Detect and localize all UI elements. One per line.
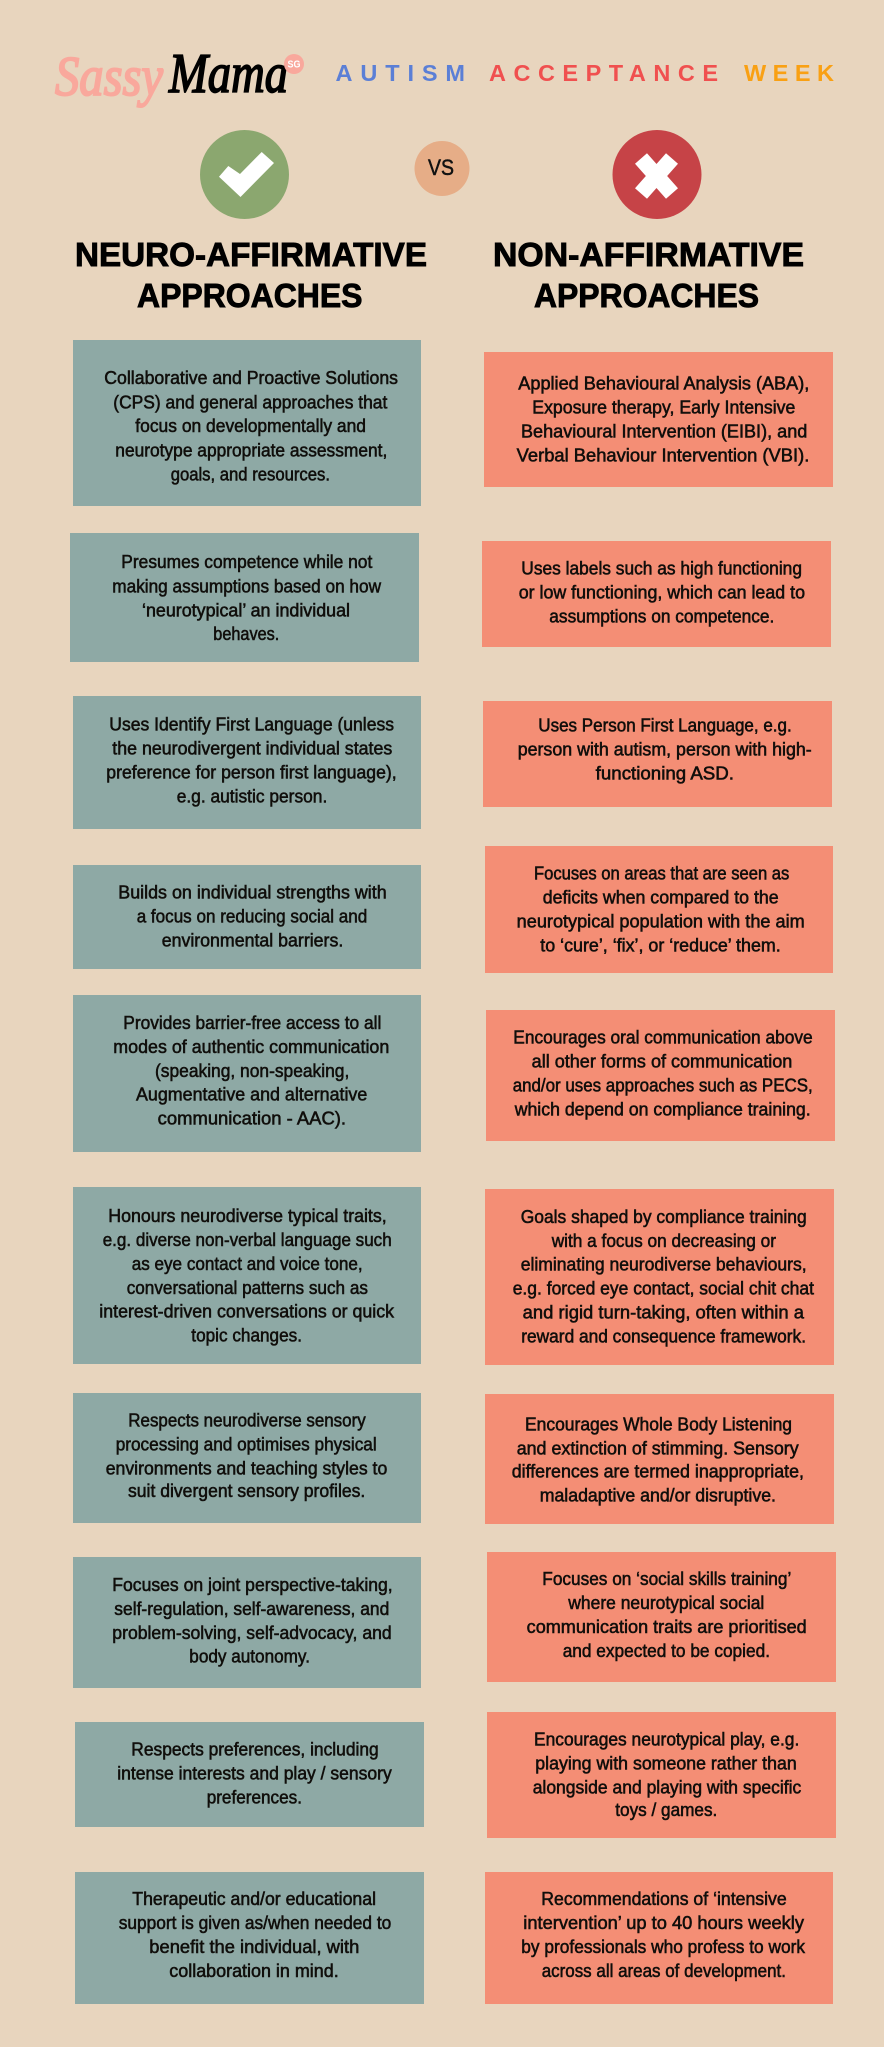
heading: non-affirmative approaches: [493, 236, 804, 314]
panel: neuro-affirmative 4: [73, 865, 421, 969]
panel: neuro-affirmative 8: self-regulation, self-awareness, and: [114, 1599, 389, 1619]
panel: non-affirmative 6: and rigid turn-taking, often within a: [523, 1302, 805, 1322]
panel: neuro-affirmative 5: (speaking, non-speaking,: [155, 1061, 349, 1081]
logo: Sassy Mama SG: Mama: [168, 43, 288, 105]
panel: non-affirmative 10: [485, 1872, 833, 2004]
panel: non-affirmative 6: Goals shaped by compliance training: [521, 1207, 807, 1227]
panel: non-affirmative 3: person with autism, person with high-: [518, 739, 812, 759]
panel: neuro-affirmative 3: Uses Identify First Language (unless: [109, 714, 394, 734]
panel: neuro-affirmative 8: problem-solving, self-advocacy, and: [112, 1623, 392, 1643]
panel: neuro-affirmative 1: neurotype appropriate assessment,: [115, 440, 387, 460]
panel: neuro-affirmative 6: conversational patterns such as: [127, 1278, 368, 1298]
panel: non-affirmative 5: Encourages oral communication above: [513, 1027, 813, 1047]
panel: non-affirmative 2: [482, 541, 831, 647]
panel: non-affirmative 9: toys / games.: [615, 1800, 717, 1820]
panel: non-affirmative 6: with a focus on decreasing or: [551, 1231, 776, 1251]
panel: neuro-affirmative 7: Respects neurodiverse sensory: [128, 1410, 366, 1430]
panel: non-affirmative 5: [486, 1010, 835, 1141]
panel: non-affirmative 1: Behavioural Intervention (EIBI), and: [521, 421, 807, 441]
panel: neuro-affirmative 8: Focuses on joint perspective-taking,: [112, 1575, 393, 1595]
panel: non-affirmative 8: where neurotypical social: [567, 1593, 764, 1613]
panel: non-affirmative 4: to ‘cure’, ‘fix’, or ‘reduce’ them.: [540, 935, 781, 955]
panel: neuro-affirmative 9: intense interests and play / sensory: [117, 1763, 392, 1783]
panel: neuro-affirmative 10: collaboration in mind.: [169, 1961, 339, 1981]
panel: neuro-affirmative 10: support is given as/when needed to: [119, 1913, 391, 1933]
panel: non-affirmative 2: or low functioning, which can lead to: [519, 582, 805, 602]
panel: non-affirmative 9: [487, 1712, 836, 1838]
panel: neuro-affirmative 5: Augmentative and alternative: [136, 1084, 367, 1104]
panel: non-affirmative 9: Encourages neurotypical play, e.g.: [534, 1729, 799, 1749]
panel: non-affirmative 10: Recommendations of ‘intensive: [541, 1889, 787, 1909]
panel: neuro-affirmative 7: processing and optimises physical: [116, 1434, 377, 1454]
panel: neuro-affirmative 9: Respects preferences, including: [131, 1739, 379, 1759]
title: Autism Acceptance Week: WEEK: [744, 60, 834, 86]
icon: VS badge: [414, 141, 470, 196]
panel: neuro-affirmative 3: e.g. autistic person.: [177, 787, 327, 807]
panel: neuro-affirmative 5: modes of authentic communication: [113, 1037, 389, 1057]
panel: neuro-affirmative 10: [75, 1872, 424, 2004]
panel: neuro-affirmative 1: (CPS) and general approaches that: [113, 392, 387, 412]
panel: neuro-affirmative 5: [73, 995, 421, 1152]
panel: neuro-affirmative 1: Collaborative and Proactive Solutions: [104, 368, 398, 388]
panel: non-affirmative 7: maladaptive and/or disruptive.: [540, 1486, 776, 1506]
panel: neuro-affirmative 8: [73, 1557, 421, 1688]
panel: non-affirmative 9: alongside and playing with specific: [533, 1777, 801, 1797]
panel: neuro-affirmative 4: Builds on individual strengths with: [118, 882, 387, 902]
panel: neuro-affirmative 2: ‘neurotypical’ an individual: [142, 601, 350, 621]
panel: neuro-affirmative 5: communication - AAC).: [158, 1108, 346, 1128]
panel: non-affirmative 3: [483, 701, 832, 807]
logo: Sassy Mama SG: SG: [288, 60, 301, 70]
panel: non-affirmative 4: Focuses on areas that are seen as: [534, 863, 789, 883]
panel: neuro-affirmative 4: a focus on reducing social and: [137, 906, 367, 926]
heading: non-affirmative approaches: APPROACHES: [534, 277, 759, 314]
panel: non-affirmative 6: e.g. forced eye contact, social chit chat: [513, 1278, 814, 1298]
title: Autism Acceptance Week: ACCEPTANCE: [489, 60, 718, 86]
panel: non-affirmative 2: assumptions on competence.: [549, 607, 774, 627]
panel: non-affirmative 7: Encourages Whole Body Listening: [525, 1414, 792, 1434]
panel: non-affirmative 8: [487, 1552, 836, 1682]
panel: neuro-affirmative 7: [73, 1393, 421, 1523]
panel: neuro-affirmative 6: topic changes.: [191, 1325, 302, 1345]
panel: non-affirmative 1: Verbal Behaviour Intervention (VBI).: [517, 445, 809, 465]
panel: non-affirmative 6: reward and consequence framework.: [521, 1326, 806, 1346]
heading: neuro-affirmative approaches: [75, 236, 427, 314]
panel: neuro-affirmative 3: [73, 696, 421, 829]
panel: neuro-affirmative 10: Therapeutic and/or educational: [132, 1889, 376, 1909]
panel: neuro-affirmative 6: e.g. diverse non-verbal language such: [103, 1230, 392, 1250]
panel: neuro-affirmative 6: interest-driven conversations or quick: [99, 1301, 395, 1321]
panel: non-affirmative 5: all other forms of communication: [532, 1051, 792, 1071]
panel: neuro-affirmative 7: environments and teaching styles to: [106, 1458, 387, 1478]
title: Autism Acceptance Week: [336, 60, 834, 86]
panel: neuro-affirmative 1: goals, and resources.: [171, 464, 330, 484]
panel: non-affirmative 6: eliminating neurodiverse behaviours,: [521, 1254, 807, 1274]
panel: non-affirmative 3: functioning ASD.: [596, 763, 734, 783]
panel: non-affirmative 3: Uses Person First Language, e.g.: [538, 715, 792, 735]
panel: neuro-affirmative 2: [70, 533, 419, 662]
panel: neuro-affirmative 2: making assumptions based on how: [112, 576, 382, 596]
panel: neuro-affirmative 7: suit divergent sensory profiles.: [128, 1481, 365, 1501]
panel: non-affirmative 7: [485, 1394, 834, 1524]
panel: neuro-affirmative 8: body autonomy.: [189, 1646, 310, 1666]
panel: neuro-affirmative 2: behaves.: [213, 624, 279, 644]
panel: non-affirmative 1: Exposure therapy, Early Intensive: [532, 397, 795, 417]
panel: neuro-affirmative 6: [73, 1187, 421, 1364]
title: Autism Acceptance Week: AUTISM: [336, 60, 465, 86]
panel: non-affirmative 8: communication traits are prioritised: [527, 1617, 807, 1637]
panel: non-affirmative 4: neurotypical population with the aim: [517, 911, 805, 931]
panel: non-affirmative 5: which depend on compliance training.: [514, 1099, 811, 1119]
panel: non-affirmative 1: Applied Behavioural Analysis (ABA),: [518, 373, 809, 393]
panel: neuro-affirmative 10: benefit the individual, with: [149, 1937, 359, 1957]
panel: non-affirmative 8: and expected to be copied.: [563, 1641, 770, 1661]
panel: non-affirmative 10: by professionals who profess to work: [521, 1937, 806, 1957]
panel: neuro-affirmative 1: focus on developmentally and: [135, 416, 366, 436]
icon: red cross: [612, 130, 702, 219]
panel: non-affirmative 2: Uses labels such as high functioning: [521, 558, 802, 578]
logo: Sassy Mama SG: Sassy: [55, 46, 163, 108]
panel: non-affirmative 10: across all areas of development.: [542, 1961, 786, 1981]
panel: neuro-affirmative 1: [73, 340, 421, 506]
panel: neuro-affirmative 4: environmental barriers.: [162, 930, 343, 950]
panel: non-affirmative 5: and/or uses approaches such as PECS,: [513, 1075, 813, 1095]
panel: neuro-affirmative 9: [75, 1722, 424, 1827]
heading: non-affirmative approaches: NON-AFFIRMATIVE: [493, 236, 804, 273]
icon: green check: [200, 130, 289, 219]
panel: neuro-affirmative 6: Honours neurodiverse typical traits,: [108, 1206, 387, 1226]
panel: neuro-affirmative 6: as eye contact and voice tone,: [132, 1254, 363, 1274]
panel: non-affirmative 10: intervention’ up to 40 hours weekly: [523, 1913, 804, 1933]
panel: neuro-affirmative 2: Presumes competence while not: [121, 552, 372, 572]
panel: non-affirmative 7: differences are termed inappropriate,: [512, 1462, 804, 1482]
panel: non-affirmative 7: and extinction of stimming. Sensory: [517, 1438, 799, 1458]
panel: non-affirmative 8: Focuses on ‘social skills training’: [542, 1569, 791, 1589]
heading: neuro-affirmative approaches: NEURO-AFFIRMATIVE: [75, 236, 427, 273]
panel: neuro-affirmative 3: the neurodivergent individual states: [112, 738, 392, 758]
panel: neuro-affirmative 3: preference for person first language),: [106, 762, 397, 782]
panel: non-affirmative 4: deficits when compared to the: [543, 887, 779, 907]
panel: neuro-affirmative 9: preferences.: [207, 1787, 302, 1807]
panel: non-affirmative 1: [484, 352, 833, 487]
heading: neuro-affirmative approaches: APPROACHES: [137, 277, 362, 314]
panel: non-affirmative 9: playing with someone rather than: [535, 1753, 797, 1773]
panel: neuro-affirmative 5: Provides barrier-free access to all: [123, 1013, 381, 1033]
icon: VS badge: VS: [428, 155, 454, 180]
panel: non-affirmative 4: [485, 846, 833, 973]
logo: Sassy Mama SG: [55, 43, 304, 108]
panel: non-affirmative 6: [485, 1189, 834, 1365]
